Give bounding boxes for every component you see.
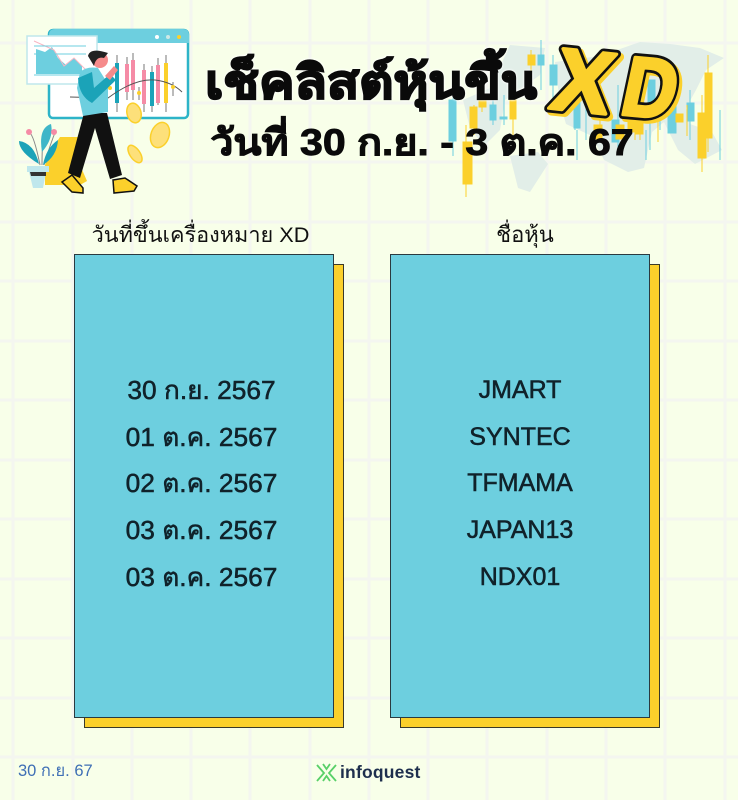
subtitle: วันที่ 30 ก.ย. - 3 ต.ค. 67 xyxy=(210,122,634,163)
date 3: 02 ต.ค. 2567 xyxy=(126,468,277,498)
illustration: trader with chart screen xyxy=(19,29,189,193)
coins xyxy=(125,102,173,165)
XD badge: X xyxy=(547,33,626,136)
small chart card xyxy=(27,36,97,84)
date 5: 03 ต.ค. 2567 xyxy=(126,562,277,592)
chart candles backdrop xyxy=(449,40,720,197)
stock 4: JAPAN13 xyxy=(467,516,573,544)
left column heading: วันที่ขึ้นเครื่องหมาย XD xyxy=(92,222,309,247)
wordmark: infoquest xyxy=(340,762,421,782)
panel: dates xyxy=(74,254,334,718)
panel: left shadow xyxy=(84,264,344,728)
logo: infoquest xyxy=(316,762,421,782)
world map backdrop xyxy=(463,42,724,192)
XD badge: X xyxy=(544,30,623,133)
XD badge xyxy=(544,30,690,139)
panel: right shadow xyxy=(400,264,660,728)
right column heading: ชื่อหุ้น xyxy=(496,222,554,247)
footer date: 30 ก.ย. 67 xyxy=(18,762,93,780)
date 4: 03 ต.ค. 2567 xyxy=(126,515,277,545)
person xyxy=(62,51,137,193)
XD badge: D xyxy=(617,42,690,139)
date 2: 01 ต.ค. 2567 xyxy=(126,422,277,452)
stock 2: SYNTEC xyxy=(469,423,571,451)
chart window xyxy=(49,29,189,118)
panel: stock names xyxy=(390,254,650,718)
stock 1: JMART xyxy=(479,376,561,404)
title: เช็คลิสต์หุ้นขึ้น xyxy=(205,56,537,108)
XD badge: D xyxy=(614,39,687,136)
stock 5: NDX01 xyxy=(480,563,560,591)
stock 3: TFMAMA xyxy=(467,469,573,497)
gold stack xyxy=(45,137,87,185)
plant xyxy=(19,124,58,188)
XD badge: X xyxy=(544,30,623,133)
date 1: 30 ก.ย. 2567 xyxy=(127,375,276,405)
icon: X mark xyxy=(316,764,337,782)
XD badge: D xyxy=(614,39,687,136)
